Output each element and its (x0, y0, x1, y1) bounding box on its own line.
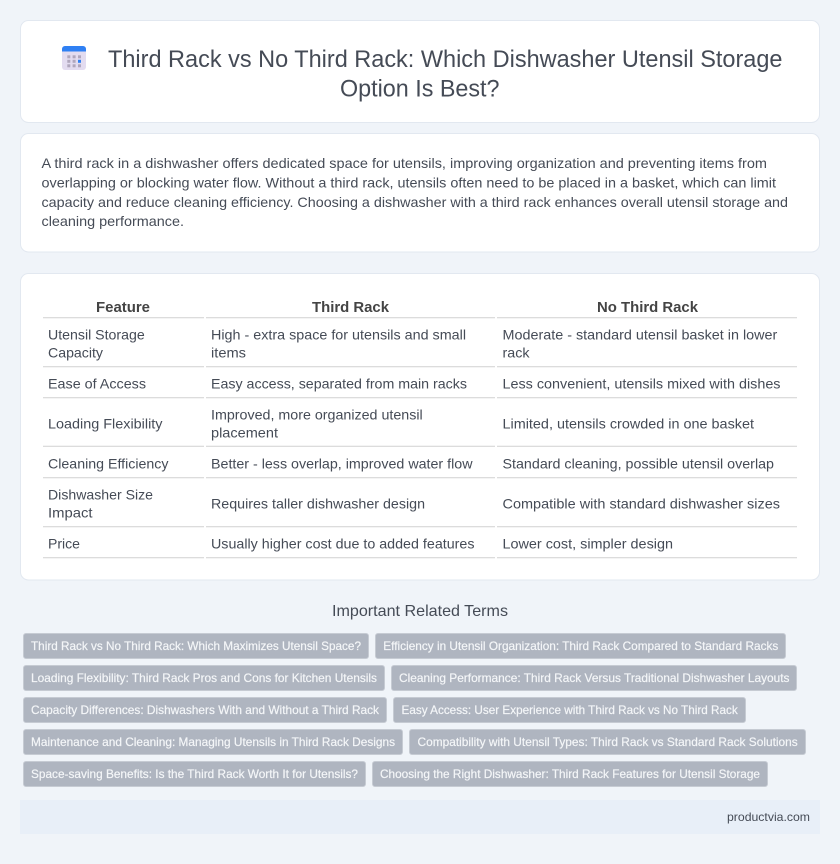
tag row 4: Maintenance and Cleaning: Managing Utensils in Third Rack Designs (31, 735, 395, 749)
footer: productvia.com (727, 810, 810, 824)
tag row 4 (24, 730, 806, 754)
tag row 2 (24, 666, 796, 690)
heading: important related terms: Important Related Terms (332, 603, 508, 620)
row: utensil storage capacity: Moderate - standard utensil basket in lower (502, 326, 778, 342)
row: ease of access: Ease of Access (48, 376, 146, 392)
title: Third Rack vs No Third Rack: Which Dishwasher Utensil Storage (108, 46, 782, 73)
tag row 5: Space-saving Benefits: Is the Third Rack Worth It for Utensils? (31, 767, 358, 781)
text block: description (42, 155, 788, 229)
row: utensil storage capacity: items (211, 344, 246, 360)
panel: comparison table (20, 274, 820, 580)
row: dishwasher size impact (48, 486, 780, 520)
row: cleaning efficiency: Cleaning Efficiency (48, 456, 168, 472)
tag row 3: Capacity Differences: Dishwashers With and Without a Third Rack (31, 703, 380, 717)
row: cleaning efficiency: Better - less overlap, improved water flow (211, 456, 473, 472)
row: ease of access (48, 376, 780, 392)
title (108, 46, 782, 102)
row: loading flexibility: placement (211, 424, 278, 440)
row: dishwasher size impact: Dishwasher Size (48, 486, 153, 502)
text block: description: overlapping or blocking water flow. Without a third rack, utensils often need to be placed in a basket, which can limit (42, 174, 776, 190)
tag row 1: Efficiency in Utensil Organization: Third Rack Compared to Standard Racks (383, 639, 778, 653)
row: loading flexibility: Limited, utensils crowded in one basket (502, 416, 754, 432)
text block: description: cleaning performance. (42, 213, 184, 229)
table header row: No Third Rack (597, 299, 699, 316)
title: Option Is Best? (340, 76, 500, 102)
row: utensil storage capacity: rack (502, 344, 531, 360)
row: loading flexibility: Loading Flexibility (48, 416, 162, 432)
table header row: Third Rack (312, 299, 390, 316)
table header row: Feature (96, 299, 150, 316)
row: utensil storage capacity: Utensil Storage (48, 326, 145, 342)
tag row 3: Easy Access: User Experience with Third Rack vs No Third Rack (402, 703, 739, 717)
panel: intro text (20, 134, 820, 252)
row: price: Price (48, 536, 80, 552)
tag row 1: Third Rack vs No Third Rack: Which Maximizes Utensil Space? (31, 639, 361, 653)
row: utensil storage capacity: Capacity (48, 344, 103, 360)
row: price: Usually higher cost due to added features (211, 536, 474, 552)
footer (20, 800, 820, 834)
tag row 4: Compatibility with Utensil Types: Third Rack vs Standard Rack Solutions (418, 735, 798, 749)
row: utensil storage capacity (48, 326, 778, 360)
tag row 2: Loading Flexibility: Third Rack Pros and Cons for Kitchen Utensils (31, 671, 377, 685)
row: price (48, 536, 673, 552)
related term tags (24, 634, 806, 786)
row: price: Lower cost, simpler design (502, 536, 673, 552)
tag row 2: Cleaning Performance: Third Rack Versus Traditional Dishwasher Layouts (399, 671, 790, 685)
icon: calendar (62, 46, 86, 70)
row: loading flexibility (48, 406, 754, 440)
row: dishwasher size impact: Impact (48, 504, 93, 520)
row: dishwasher size impact: Requires taller dishwasher design (211, 496, 425, 512)
tag row 5 (24, 762, 768, 786)
row: cleaning efficiency: Standard cleaning, possible utensil overlap (502, 456, 774, 472)
tag row 3 (24, 698, 746, 722)
row: cleaning efficiency (48, 456, 774, 472)
row: ease of access: Easy access, separated from main racks (211, 376, 467, 392)
panel: header (20, 20, 820, 122)
row: utensil storage capacity: High - extra space for utensils and small (211, 326, 466, 342)
tag row 1 (24, 634, 786, 658)
table header row (96, 299, 699, 316)
row: loading flexibility: Improved, more organized utensil (211, 406, 423, 422)
text block: description: capacity and reduce cleaning efficiency. Choosing a dishwasher with a third rack enhances overall utensil storage and (42, 194, 788, 210)
row: ease of access: Less convenient, utensils mixed with dishes (502, 376, 780, 392)
tag row 5: Choosing the Right Dishwasher: Third Rack Features for Utensil Storage (380, 767, 760, 781)
text block: description: A third rack in a dishwasher offers dedicated space for utensils, improving organization and preventing items from (42, 155, 767, 171)
row: dishwasher size impact: Compatible with standard dishwasher sizes (502, 496, 780, 512)
